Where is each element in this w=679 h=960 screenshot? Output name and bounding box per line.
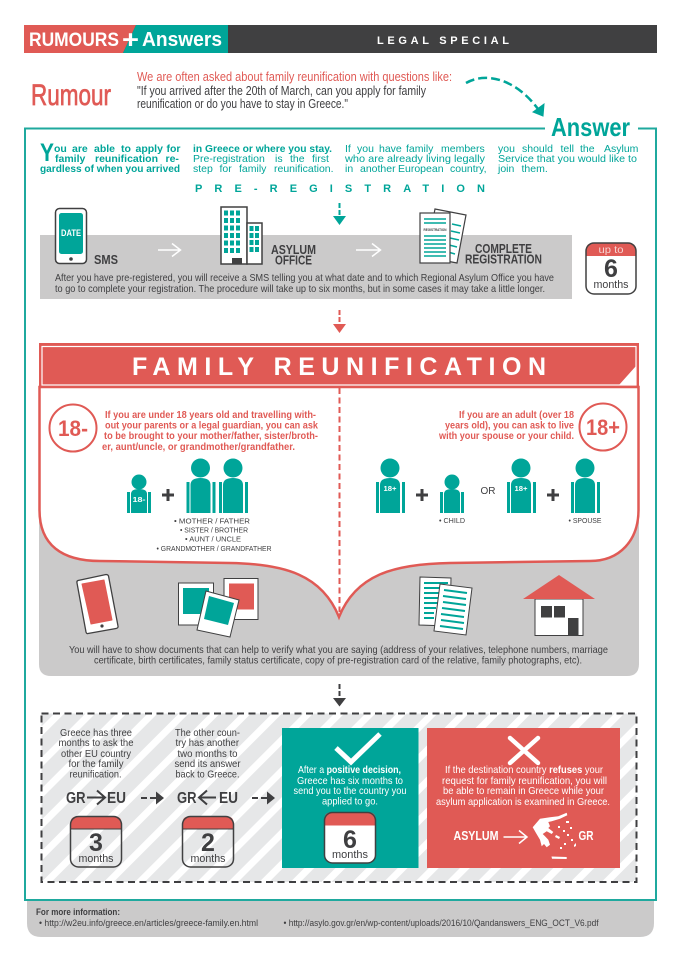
answer intro text: European — [398, 163, 444, 175]
icon: phone with date — [56, 208, 86, 264]
answer intro text: Asylum — [604, 143, 639, 155]
text: greece three months — [58, 727, 134, 780]
text: greece three months: other EU country — [61, 748, 132, 760]
arrow: black down — [333, 684, 346, 706]
icon: phone with date: DATE — [61, 228, 81, 238]
text: over 18: with your spouse or your child. — [438, 430, 574, 442]
label: complete registration: COMPLETE — [475, 241, 532, 256]
people: adult plus child or spouse — [376, 458, 600, 513]
icon: map of Greece — [533, 813, 576, 859]
answer intro text: Y — [40, 139, 54, 167]
label: child: • CHILD — [439, 516, 466, 525]
icon: photographs — [178, 578, 258, 637]
answer intro text: you — [498, 143, 515, 155]
answer intro text: is — [275, 153, 283, 165]
documents grey background — [39, 500, 639, 676]
answer intro text: in Greece or where you stay. — [193, 143, 332, 155]
text: over 18: years old), you can ask to live — [445, 420, 574, 432]
rumour quote — [137, 70, 452, 111]
answer intro text: tell — [560, 143, 574, 155]
answer intro text: family — [406, 143, 434, 155]
documents description: You will have to show documents that can help to verify what you are saying (address of your relatives, telephone numbers, marriage — [69, 644, 608, 656]
panel: family reunification — [39, 343, 639, 676]
answer intro text: the — [580, 143, 595, 155]
text: greece three months: Greece has three — [60, 727, 132, 739]
label: complete registration: REGISTRATION — [465, 252, 542, 266]
answer intro text: family — [55, 153, 86, 165]
text: other country two months: two months to — [178, 748, 238, 760]
text: refusal — [436, 764, 610, 808]
arrow: red down — [333, 310, 346, 333]
answer intro text — [40, 139, 639, 175]
icon: registration documents: REGISTRATION — [424, 228, 447, 232]
rumour quote: We are often asked about family reunification with questions like: — [137, 70, 452, 84]
icon: phone red — [77, 574, 118, 634]
answer intro text: the — [290, 153, 305, 165]
panel: refused decision — [427, 728, 620, 868]
list of relatives: • AUNT / UNCLE — [185, 534, 241, 544]
answer intro text: them. — [522, 163, 548, 175]
text: greece three months: reunification. — [70, 768, 122, 780]
people: adult plus child or spouse: 18+ — [514, 486, 528, 493]
label: asylum: ASYLUM — [454, 828, 498, 843]
pre-registration description: After you have pre-registered, you will receive a SMS telling you at what date and to which Regional Asylum Office you have — [55, 272, 554, 284]
badge: over 18: 18+ — [586, 415, 620, 440]
diagram: GR to EU: GR — [66, 790, 86, 807]
answer intro text: reunification. — [274, 163, 334, 175]
label: complete registration — [465, 241, 542, 266]
header bar — [24, 25, 657, 54]
text: under 18: If you are under 18 years old and travelling with- — [105, 409, 316, 421]
icon: house — [523, 575, 595, 636]
text: other country two months: back to Greece. — [176, 768, 240, 780]
label: spouse: • SPOUSE — [568, 516, 602, 525]
calendar: up to 6 months: months — [594, 279, 629, 291]
answer intro text: for — [166, 143, 180, 155]
text: under 18 — [102, 409, 318, 453]
answer intro text: to — [121, 143, 131, 155]
panel: timeline dashed box — [42, 714, 636, 882]
text: positive decision: applied to go. — [322, 796, 378, 808]
calendar: 3 months: 3 — [89, 829, 103, 857]
diagram: EU to GR: EU — [219, 790, 238, 807]
diagram: EU to GR — [177, 790, 238, 807]
answer intro text: another — [360, 163, 396, 175]
family reunification banner — [39, 343, 639, 388]
pre-registration description: to go to complete your registration. The procedure will take up to six months, but in some cases it may take a little longer. — [55, 283, 545, 295]
text: positive decision: send you to the country you — [294, 785, 407, 797]
text: refusal: request for family reunification, you will — [442, 775, 607, 787]
answer intro text: If — [345, 143, 351, 155]
answer frame — [25, 128, 656, 900]
icon: check mark — [336, 734, 380, 762]
badge: under 18: 18- — [58, 416, 88, 441]
diagram: GR to EU: EU — [107, 790, 126, 807]
answer intro text: country, — [450, 163, 487, 175]
diagram: GR to EU — [66, 790, 126, 807]
badge: over 18 — [580, 404, 626, 450]
people: adult plus child or spouse: OR — [480, 485, 496, 497]
label: asylum office: OFFICE — [275, 252, 312, 268]
badge: under 18 — [50, 404, 96, 452]
answer intro text: are — [72, 143, 88, 155]
answer heading: Answer — [551, 112, 630, 142]
answer intro text: reunification — [95, 153, 158, 165]
text: positive decision: Greece has six months to — [297, 775, 403, 787]
arrow: step two to decision — [252, 792, 275, 804]
arrow: rumour to answer — [466, 78, 544, 116]
list of relatives: • MOTHER / FATHER — [174, 516, 251, 526]
icon: cross — [510, 738, 538, 763]
label: asylum office — [271, 242, 316, 268]
people: adult plus child or spouse: 18+ — [384, 486, 396, 493]
header bar: RUMOURS — [29, 29, 119, 51]
answer intro text: should — [522, 143, 553, 155]
diagram: EU to GR: GR — [177, 790, 197, 807]
icon: asylum office building — [221, 207, 262, 264]
pre-registration description — [55, 272, 554, 295]
arrow: SMS to office — [158, 244, 180, 256]
icon: registration documents — [420, 209, 466, 263]
documents description: certificate, birth certificates, family status certificate, copy of pre-registration card of the relative, family photographs, etc). — [94, 654, 582, 666]
rumour heading: Rumour — [31, 79, 111, 112]
text: greece three months: for the family — [68, 758, 124, 770]
calendar: 2 months — [182, 816, 234, 867]
text: under 18: out your parents or a legal guardian, you can ask — [105, 420, 318, 432]
text: positive decision — [294, 764, 407, 808]
text: positive decision: After a positive decision, — [298, 764, 401, 776]
calendar: up to 6 months: up to — [598, 244, 624, 256]
header bar: + — [122, 26, 139, 54]
answer intro text: re- — [166, 153, 179, 165]
arrow: teal down — [333, 203, 346, 225]
answer intro text: in — [345, 163, 353, 175]
footer: more information: • http://asylo.gov.gr/en/wp-content/uploads/2016/10/Qandanswers_ENG_OCT_V6.pdf — [284, 918, 599, 928]
rumour quote: "If you arrived after the 20th of March, can you apply for family — [137, 84, 427, 98]
calendar: 6 months — [324, 812, 376, 863]
pre-registration heading: PRE-REGISTRATION — [195, 183, 485, 195]
answer intro text: you — [357, 143, 374, 155]
calendar: 6 months: 6 — [343, 826, 357, 854]
answer intro text: ou — [54, 143, 67, 155]
answer intro text: for — [220, 163, 232, 175]
text: under 18: to be brought to your mother/father, sister/broth- — [104, 430, 318, 442]
header bar: LEGAL SPECIAL — [377, 35, 509, 47]
list of relatives: • GRANDMOTHER / GRANDFATHER — [156, 544, 272, 553]
answer intro text: gardless of when you arrived — [40, 163, 180, 175]
answer intro text: first — [312, 153, 329, 165]
text: greece three months: months to ask the — [58, 737, 134, 749]
text: refusal: be able to remain in Greece while your — [443, 785, 604, 797]
label: GR: GR — [578, 828, 594, 843]
answer intro text: step — [193, 163, 213, 175]
footer: more information: • http://w2eu.info/greece.en/articles/greece-family.en.html — [39, 918, 258, 928]
answer intro text: family — [239, 163, 267, 175]
answer intro text: able — [94, 143, 115, 155]
calendar: 3 months: months — [78, 853, 114, 865]
text: refusal: If the destination country refuses your — [445, 764, 603, 776]
calendar: 2 months: 2 — [201, 829, 215, 857]
icon: documents — [419, 577, 472, 635]
calendar: 6 months: months — [332, 849, 368, 861]
answer intro text: members — [441, 143, 485, 155]
text: other country two months: The other coun- — [175, 727, 240, 739]
answer intro text: Pre-registration — [193, 153, 265, 165]
people: under 18 plus relatives — [127, 458, 248, 513]
arrow: office to registration — [356, 244, 380, 256]
calendar: 3 months — [70, 816, 122, 867]
list of relatives — [156, 516, 272, 553]
calendar: 2 months: months — [190, 853, 226, 865]
panel: pre-registration steps — [40, 207, 572, 299]
footer: more information: For more information: — [36, 907, 120, 917]
answer intro text: join — [497, 163, 515, 175]
text: refusal: asylum application is examined in Greece. — [436, 796, 610, 808]
arrow: step one to two — [141, 792, 164, 804]
list of relatives: • SISTER / BROTHER — [180, 526, 249, 534]
label: SMS: SMS — [94, 253, 118, 267]
family reunification banner: FAMILY REUNIFICATION — [132, 353, 546, 381]
answer intro text: who are already living legally — [344, 153, 486, 165]
centre dashed divider — [338, 388, 340, 612]
calendar: up to 6 months — [586, 243, 636, 294]
people: under 18 plus relatives: 18- — [132, 497, 146, 504]
calendar: up to 6 months: 6 — [604, 255, 618, 283]
text: under 18: er, aunt/uncle, or grandmother/grandfather. — [102, 441, 295, 453]
rumour quote: reunification or do you have to stay in Greece." — [137, 97, 348, 111]
answer intro text: Service that you would like to — [498, 153, 637, 165]
answer intro text: have — [379, 143, 402, 155]
documents description — [69, 644, 608, 666]
text: other country two months: send its answer — [174, 758, 241, 770]
panel: positive decision — [282, 728, 418, 868]
answer intro text: apply — [136, 143, 163, 155]
header bar: Answers — [142, 29, 222, 51]
text: over 18: If you are an adult (over 18 — [459, 409, 574, 421]
arrow: asylum to Greece — [504, 830, 527, 844]
footer: more information — [27, 901, 654, 937]
text: other country two months — [174, 727, 241, 780]
label: asylum office: ASYLUM — [271, 242, 316, 257]
white speech panel — [40, 387, 638, 617]
text: over 18 — [438, 409, 574, 442]
text: other country two months: try has another — [176, 737, 239, 749]
